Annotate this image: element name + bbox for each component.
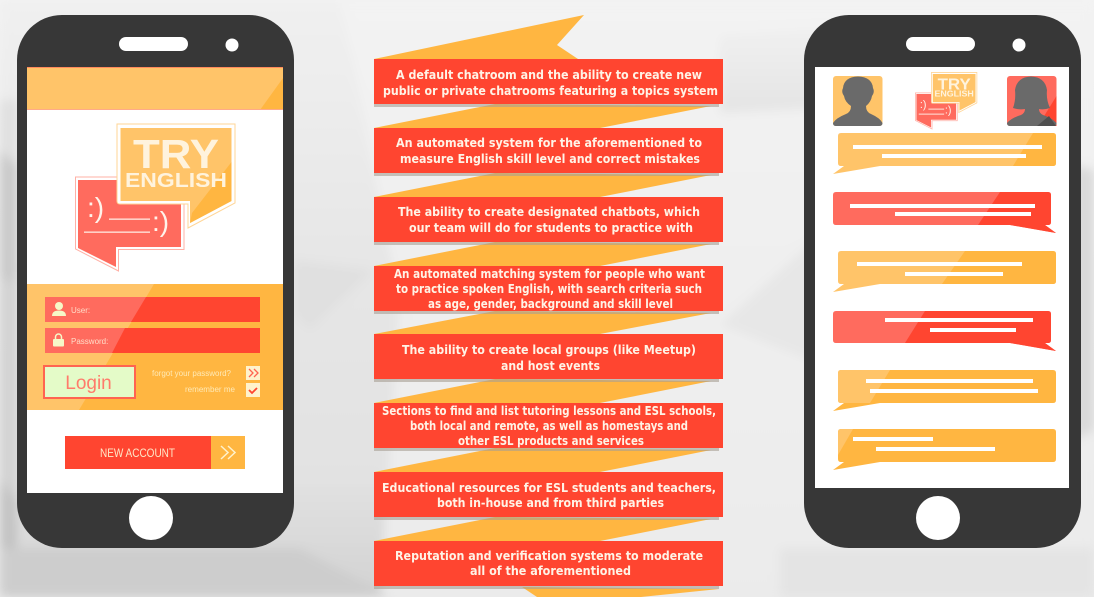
feature 8: Reputation and verification systems to moderate — [395, 548, 703, 563]
feature 1 — [374, 59, 723, 104]
feature 3: The ability to create designated chatbots, which — [398, 204, 700, 219]
mini logo: :) — [920, 99, 926, 111]
feature 4: as age, gender, background and skill level — [428, 296, 673, 311]
feature 2: An automated system for the aforementioned to — [396, 135, 702, 150]
red speech bubble: :) — [152, 206, 169, 237]
red speech bubble: :) — [87, 192, 104, 223]
speaker — [119, 37, 188, 51]
user field — [45, 297, 260, 322]
orange speech bubble: ENGLISH — [125, 169, 227, 192]
feature 7 — [374, 472, 723, 517]
feature 1: public or private chatrooms featuring a topics system — [383, 83, 718, 98]
feature 7: both in-house and from third parties — [437, 495, 664, 510]
feature 1: A default chatroom and the ability to create new — [396, 67, 702, 82]
feature 5: The ability to create local groups (like Meetup) — [402, 342, 696, 357]
chat bubble 1 — [833, 133, 1056, 174]
phone body — [17, 15, 294, 548]
chat bubble 4 — [833, 311, 1056, 351]
new account button: NEW ACCOUNT — [100, 448, 175, 460]
right phone: chat screen — [804, 15, 1081, 548]
feature 7: Educational resources for ESL students and teachers, — [382, 480, 716, 495]
feature 8 — [374, 541, 723, 586]
home button — [129, 496, 173, 540]
chat bubble 5 — [833, 370, 1056, 411]
feature 5: and host events — [501, 358, 600, 373]
password field: Password: — [71, 337, 108, 346]
mini logo — [915, 72, 977, 129]
logo: Try English — [76, 124, 235, 271]
login button — [44, 366, 135, 398]
chat bubble 3 — [833, 251, 1056, 292]
chat bubble 6 — [833, 429, 1056, 470]
feature 6: other ESL products and services — [458, 433, 644, 448]
login panel — [27, 284, 283, 410]
phone body — [804, 15, 1081, 548]
orange speech bubble — [117, 124, 235, 228]
orange speech bubble: TRY — [133, 131, 219, 177]
screen — [27, 67, 283, 493]
password field — [45, 328, 260, 353]
mini logo: :) — [945, 105, 951, 117]
avatar: female — [1007, 76, 1056, 126]
camera — [226, 38, 238, 52]
forgot password link — [152, 366, 260, 380]
login button: Login — [65, 373, 112, 394]
feature 2: measure English skill level and correct mistakes — [400, 151, 700, 166]
feature 5 — [374, 334, 723, 379]
feature 3: our team will do for students to practice with — [409, 220, 693, 235]
feature 4 — [374, 266, 723, 311]
left phone: login screen — [17, 15, 294, 548]
orange ribbon folds — [374, 15, 719, 597]
ribbon shadows — [374, 104, 719, 589]
speaker — [906, 37, 975, 51]
remember me checkbox — [185, 383, 260, 397]
red speech bubble — [76, 177, 184, 271]
mini logo: ENGLISH — [935, 90, 974, 99]
camera — [1012, 38, 1026, 52]
avatar: male — [833, 76, 882, 126]
new account button — [65, 436, 245, 469]
forgot password link: forgot your password? — [152, 369, 232, 378]
screen — [815, 67, 1069, 488]
chat bubble 2 — [833, 192, 1056, 233]
feature 3 — [374, 197, 723, 242]
feature 8: all of the aforementioned — [470, 563, 631, 578]
feature 6: both local and remote, as well as homestays and — [410, 418, 688, 433]
remember me checkbox: remember me — [185, 385, 236, 394]
feature 6 — [374, 403, 723, 448]
feature 4: An automated matching system for people who want — [394, 266, 705, 281]
user field: User: — [71, 306, 90, 315]
mini logo: TRY — [938, 76, 971, 93]
feature 4: to practice spoken English, with search criteria such — [396, 281, 702, 296]
feature 2 — [374, 128, 723, 173]
top header band — [27, 67, 283, 110]
home button — [916, 496, 960, 540]
feature 6: Sections to find and list tutoring lessons and ESL schools, — [382, 403, 716, 418]
central ribbon feature list — [374, 15, 723, 597]
